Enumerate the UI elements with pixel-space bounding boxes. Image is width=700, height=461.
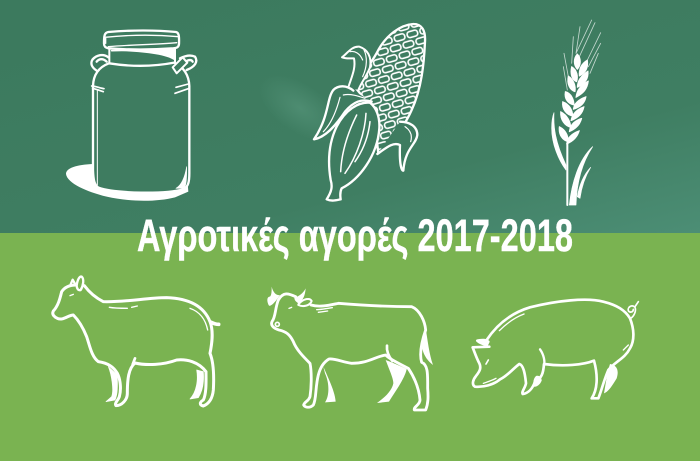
- icon: cow: [267, 287, 433, 410]
- cloud haze: [247, 61, 353, 155]
- icon: wheat stalk: [552, 20, 601, 205]
- lower background: [0, 233, 700, 461]
- wheat awns: [563, 20, 601, 90]
- upper husk: [342, 47, 370, 90]
- icon: milk can: [66, 30, 196, 201]
- wheat stem and leaves: [564, 143, 570, 205]
- icon: sheep: [53, 277, 219, 406]
- icon: corn cob: [314, 24, 425, 201]
- front husk: [327, 103, 379, 201]
- left husk: [314, 86, 372, 139]
- corn kernels: [356, 24, 425, 153]
- right husk: [377, 122, 417, 171]
- icon: pig: [473, 300, 638, 398]
- upper background: [0, 0, 700, 233]
- wheat grains: [559, 54, 588, 144]
